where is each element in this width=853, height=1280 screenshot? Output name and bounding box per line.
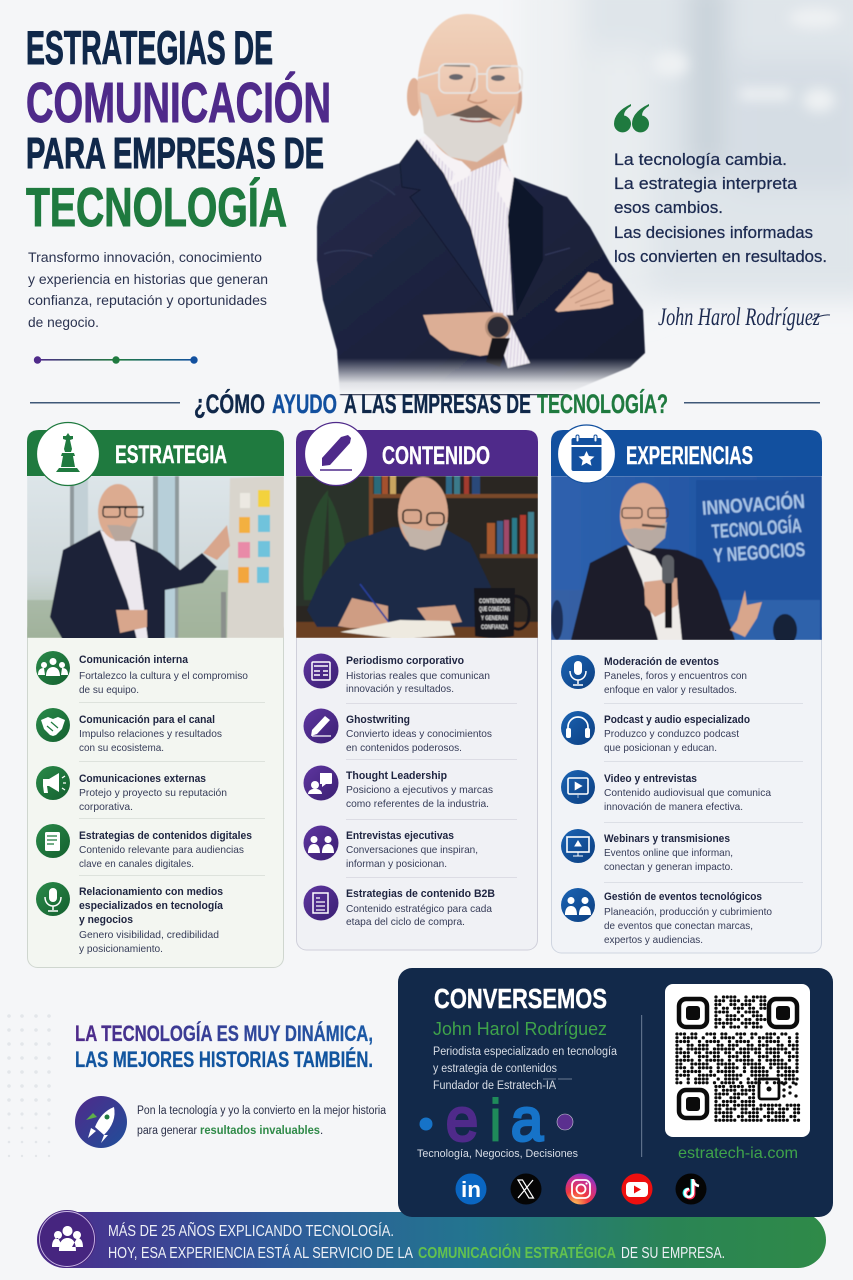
- section heading: ¿CÓMO: [194, 388, 265, 419]
- item: ghostwriting: Ghostwriting: [346, 714, 410, 726]
- panel: experiencias: [551, 425, 822, 953]
- logo: eia: i: [490, 1088, 501, 1154]
- photo: strategy at whiteboard: [27, 476, 284, 640]
- title: TECNOLOGÍA: [26, 176, 287, 238]
- item: comunicación para el canal: [36, 708, 222, 754]
- header: estrategia: ESTRATEGIA: [115, 441, 227, 469]
- bottom banner: MÁS DE 25 AÑOS EXPLICANDO TECNOLOGÍA.: [108, 1223, 394, 1240]
- bio: Fundador de Estratech-IA: [433, 1080, 556, 1092]
- photo: writing at desk: QUE CONECTAN: [479, 607, 510, 613]
- item: video y entrevistas: Contenido audiovisual que comunica: [604, 788, 771, 799]
- item: ghostwriting: Convierto ideas y conocimientos: [346, 729, 492, 740]
- rocket message: para generar: [137, 1125, 197, 1137]
- panel: contenido: [296, 422, 538, 950]
- rocket message: .: [320, 1125, 323, 1137]
- panel: conversemos: [398, 968, 833, 1217]
- three dot timeline: [34, 356, 198, 364]
- icon: chess piece: [36, 422, 100, 486]
- logo: eia: [417, 1086, 578, 1160]
- item: video y entrevistas: [561, 770, 771, 813]
- photo: writing at desk: Y GENERAN: [481, 616, 508, 622]
- section heading: [30, 388, 820, 419]
- heading: conversemos: CONVERSEMOS: [434, 983, 607, 1014]
- icon: instagram: [566, 1174, 596, 1204]
- item: video y entrevistas: Video y entrevistas: [604, 773, 697, 785]
- intro paragraph: confianza, reputación y oportunidades: [28, 293, 267, 308]
- item: podcast y audio: que posicionan y educan.: [604, 743, 717, 754]
- icon: pencil: [304, 422, 368, 486]
- header: experiencias: EXPERIENCIAS: [626, 442, 753, 470]
- item: moderación de eventos: [561, 655, 747, 696]
- tagline: LAS MEJORES HISTORIAS TAMBIÉN.: [75, 1047, 373, 1072]
- item: periodismo corporativo: [304, 654, 490, 695]
- item: estrategias de contenidos digitales: Estrategias de contenidos digitales: [79, 830, 252, 842]
- logo: eia: a: [511, 1086, 544, 1154]
- rocket message: Pon la tecnología y yo la convierto en la mejor historia: [137, 1105, 387, 1117]
- logo: eia: Tecnología, Negocios, Decisiones: [417, 1148, 578, 1160]
- name: John Harol Rodríguez: [433, 1019, 607, 1039]
- item: comunicaciones externas: Comunicaciones externas: [79, 773, 206, 785]
- icon: linkedin: in: [461, 1177, 481, 1202]
- item: estrategias de contenido B2B: Estrategias de contenido B2B: [346, 888, 495, 900]
- intro paragraph: Transformo innovación, conocimiento: [28, 250, 262, 265]
- item: thought leadership: Thought Leadership: [346, 770, 447, 782]
- icon: calendar: [558, 425, 616, 483]
- item: comunicación interna: Comunicación interna: [79, 654, 189, 666]
- QR code: [665, 984, 810, 1137]
- website: estratech-ia.com: [678, 1145, 798, 1162]
- item: ghostwriting: [304, 708, 492, 754]
- item: comunicaciones externas: corporativa.: [79, 802, 133, 813]
- decorative dot grid: [7, 1014, 51, 1157]
- item: relacionamiento con medios: especializados en tecnología: [79, 900, 224, 912]
- section heading: TECNOLOGÍA?: [537, 388, 668, 419]
- item: entrevistas ejecutivas: Conversaciones que inspiran,: [346, 845, 478, 856]
- item: relacionamiento con medios: y posicionamiento.: [79, 944, 163, 955]
- item: gestión de eventos: de eventos que conectan marcas,: [604, 921, 753, 932]
- intro paragraph: de negocio.: [28, 315, 99, 330]
- item: moderación de eventos: enfoque en valor y resultados.: [604, 685, 737, 696]
- photo: speaker on stage: TECNOLOGÍA: [711, 514, 802, 543]
- item: gestión de eventos: Planeación, producción y cubrimiento: [604, 907, 772, 918]
- icon: linkedin: [456, 1174, 486, 1204]
- quote text: La tecnología cambia.: [614, 151, 787, 169]
- panel: estrategia: [27, 422, 284, 968]
- item: podcast y audio: Podcast y audio especializado: [604, 714, 750, 726]
- section heading: A LAS EMPRESAS DE: [344, 389, 531, 419]
- item: comunicaciones externas: [36, 766, 227, 813]
- quote text: los convierten en resultados.: [614, 248, 827, 266]
- photo: speaker on stage: INNOVACIÓN: [701, 489, 806, 520]
- tagline: LA TECNOLOGÍA ES MUY DINÁMICA,: [75, 1021, 373, 1046]
- quote text: [614, 151, 827, 266]
- intro paragraph: y experiencia en historias que generan: [28, 272, 268, 287]
- item: relacionamiento con medios: Relacionamiento con medios: [79, 886, 223, 898]
- item: thought leadership: [304, 766, 493, 810]
- item: gestión de eventos: [561, 888, 772, 946]
- item: comunicación para el canal: con su ecosistema.: [79, 743, 164, 754]
- quote text: esos cambios.: [614, 199, 723, 217]
- item: periodismo corporativo: innovación y resultados.: [346, 684, 454, 695]
- item: thought leadership: como referentes de la industria.: [346, 799, 489, 810]
- item: estrategias de contenido B2B: Contenido estratégico para cada: [346, 904, 492, 915]
- item: webinars y transmisiones: Webinars y transmisiones: [604, 833, 730, 845]
- item: comunicación interna: de su equipo.: [79, 685, 139, 696]
- item: podcast y audio: [561, 711, 750, 754]
- item: video y entrevistas: innovación de manera efectiva.: [604, 802, 743, 813]
- item: comunicaciones externas: Protejo y proyecto su reputación: [79, 788, 227, 799]
- item: moderación de eventos: Paneles, foros y encuentros con: [604, 671, 747, 682]
- item: estrategias de contenido B2B: [304, 886, 495, 928]
- quote text: Las decisiones informadas: [614, 224, 813, 242]
- item: periodismo corporativo: Historias reales que comunican: [346, 671, 490, 682]
- item: gestión de eventos: expertos y audiencias.: [604, 935, 703, 946]
- item: podcast y audio: Produzco y conduzco podcast: [604, 729, 739, 740]
- item: relacionamiento con medios: Genero visibilidad, credibilidad: [79, 930, 219, 941]
- photo: writing at desk: [296, 476, 538, 639]
- section heading: AYUDO: [272, 389, 337, 419]
- title: ESTRATEGIAS DE: [26, 21, 273, 74]
- photo: writing at desk: CONFIANZA: [481, 625, 508, 631]
- bottom banner: HOY, ESA EXPERIENCIA ESTÁ AL SERVICIO DE LA: [108, 1245, 414, 1262]
- logo: eia: e: [446, 1086, 478, 1154]
- item: entrevistas ejecutivas: informan y posicionan.: [346, 859, 447, 870]
- item: estrategias de contenido B2B: etapa del ciclo de compra.: [346, 917, 465, 928]
- item: comunicación interna: [36, 651, 248, 696]
- item: entrevistas ejecutivas: Entrevistas ejecutivas: [346, 830, 454, 842]
- title: PARA EMPRESAS DE: [26, 129, 324, 178]
- bio: Periodista especializado en tecnología: [433, 1046, 618, 1058]
- item: estrategias de contenidos digitales: Contenido relevante para audiencias: [79, 845, 244, 856]
- item: ghostwriting: en contenidos poderosos.: [346, 743, 462, 754]
- title: [26, 21, 331, 238]
- rocket message: [137, 1105, 387, 1137]
- item: gestión de eventos: Gestión de eventos tecnológicos: [604, 891, 762, 903]
- item: comunicación para el canal: Impulso relaciones y resultados: [79, 729, 222, 740]
- photo: speaker on stage: [551, 476, 822, 646]
- item: relacionamiento con medios: [36, 882, 224, 955]
- item: moderación de eventos: Moderación de eventos: [604, 656, 719, 668]
- social icons: [456, 1174, 706, 1204]
- icon: rocket: [75, 1096, 127, 1148]
- icon: youtube: [622, 1174, 652, 1204]
- icon: audience: [38, 1210, 96, 1268]
- item: estrategias de contenidos digitales: [36, 824, 252, 870]
- quote text: La estrategia interpreta: [614, 175, 798, 193]
- item: comunicación para el canal: Comunicación para el canal: [79, 714, 215, 726]
- item: webinars y transmisiones: Eventos online que informan,: [604, 848, 733, 859]
- photo: writing at desk: CONTENIDOS: [479, 599, 510, 605]
- rocket message: resultados invaluables: [200, 1123, 320, 1137]
- item: estrategias de contenidos digitales: clave en canales digitales.: [79, 859, 194, 870]
- tagline: [75, 1021, 373, 1072]
- item: webinars y transmisiones: conectan y generan impacto.: [604, 862, 733, 873]
- title: COMUNICACIÓN: [26, 71, 331, 135]
- bottom banner: DE SU EMPRESA.: [621, 1245, 725, 1262]
- bottom banner: [37, 1210, 826, 1268]
- item: entrevistas ejecutivas: [304, 826, 478, 870]
- header: contenido: CONTENIDO: [382, 442, 490, 470]
- item: thought leadership: Posiciono a ejecutivos y marcas: [346, 785, 493, 796]
- portrait bottom fade: [300, 358, 680, 394]
- bio: [433, 1046, 618, 1092]
- intro paragraph: [28, 250, 268, 330]
- icon: x: [510, 1174, 542, 1204]
- icon: tiktok: [676, 1174, 706, 1204]
- photo: speaker on stage: Y NEGOCIOS: [713, 539, 806, 567]
- bio: y estrategia de contenidos: [433, 1063, 557, 1075]
- item: periodismo corporativo: Periodismo corporativo: [346, 655, 464, 667]
- item: comunicación interna: Fortalezco la cultura y el compromiso: [79, 671, 248, 682]
- item: relacionamiento con medios: y negocios: [79, 914, 133, 926]
- portrait: hero photo: [317, 14, 645, 395]
- bottom banner: COMUNICACIÓN ESTRATÉGICA: [418, 1244, 616, 1262]
- quote mark: [614, 104, 649, 132]
- item: webinars y transmisiones: [561, 829, 733, 873]
